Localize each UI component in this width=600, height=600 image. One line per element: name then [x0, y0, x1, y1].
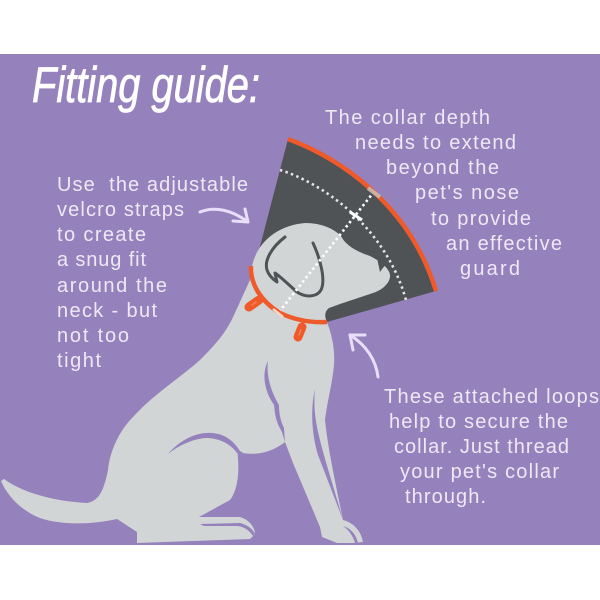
text: attached loops: These attached loops — [384, 386, 599, 408]
nose — [378, 260, 385, 272]
arrow: to loops — [350, 335, 378, 377]
text: attached loops: through. — [405, 486, 486, 508]
text: collar depth — [325, 107, 562, 280]
ear — [266, 237, 323, 296]
text: attached loops: your pet's collar — [400, 461, 559, 483]
text: velcro straps: not too — [57, 325, 129, 347]
text: collar depth: The collar depth — [325, 107, 490, 129]
text: collar depth: an effective — [446, 233, 562, 255]
depth tick — [350, 212, 362, 220]
text: collar depth: needs to extend — [355, 132, 516, 154]
arrow: to velcro strap — [200, 209, 248, 222]
text: attached loops — [384, 386, 599, 508]
text: attached loops: help to secure the — [389, 411, 568, 433]
text: collar depth: guard — [460, 258, 520, 280]
text: velcro straps: velcro straps — [57, 199, 184, 221]
text: velcro straps: to create — [57, 224, 146, 246]
shoulder line — [264, 361, 285, 442]
dotted depth line — [279, 193, 373, 312]
title: Fitting guide: — [32, 57, 260, 113]
neck tick — [273, 309, 283, 317]
illustration: dog wearing collar — [1, 139, 436, 543]
haunch line — [168, 433, 241, 454]
front leg line — [312, 389, 343, 520]
orange rim — [288, 139, 436, 291]
dotted arc — [280, 170, 406, 300]
text: velcro straps: neck - but — [57, 300, 157, 322]
text: velcro straps — [57, 174, 248, 372]
body contour lines — [168, 361, 358, 543]
text: velcro straps: around the — [57, 275, 167, 297]
text: velcro straps: Use the adjustable — [57, 174, 248, 196]
dog silhouette — [1, 223, 390, 543]
text: velcro straps: a snug fit — [57, 249, 146, 271]
text: collar depth: to provide — [431, 208, 531, 230]
text: collar depth: beyond the — [386, 157, 499, 179]
text: attached loops: collar. Just thread — [394, 436, 569, 458]
neck band — [251, 266, 327, 322]
left loop — [249, 300, 259, 307]
text: collar depth: pet's nose — [415, 182, 519, 204]
text: velcro straps: tight — [57, 350, 101, 372]
cone collar — [250, 139, 436, 322]
toe lines — [200, 523, 255, 536]
bottom loop — [298, 327, 302, 337]
rim tick — [368, 188, 380, 197]
